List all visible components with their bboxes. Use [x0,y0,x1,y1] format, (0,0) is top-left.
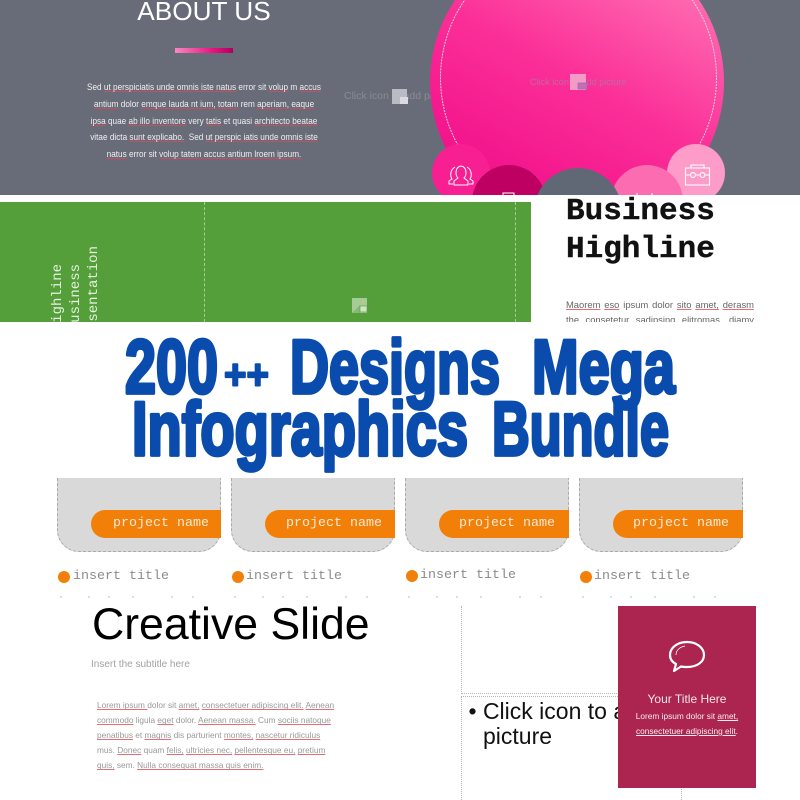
icon: briefcase [686,165,710,185]
body text: amet, [695,299,719,310]
placeholder bullet text: • Click icon to add [468,698,652,724]
placeholder icon: left picture [392,89,408,104]
icon: people [449,166,473,185]
project name 2: project name [286,516,382,531]
card body text [636,711,738,736]
panel: business highline text [531,195,800,322]
circle: dark magenta [472,165,546,239]
title line 1: ++ [224,351,269,398]
icon: stub on dark magenta circle [503,193,514,199]
card body text: Lorem ipsum dolor sit amet, [636,711,738,721]
placeholder text: click icon left: Click icon to add pi [344,90,432,102]
circle: slate [534,168,622,256]
project name 1: project name [113,516,209,531]
title line 1: Designs [290,325,500,410]
about us paragraph: ipsa quae ab illo inventore very tatis et quasi architecto beatae [91,115,317,126]
body text: quis, sem. Nulla consequat massa quis enim. [97,760,264,770]
heading: business highline: Business [566,195,715,229]
main title [125,325,677,473]
about us paragraph: antium dolor emque lauda nt ium, totam rem aperiam, eaque [94,98,314,109]
dashed guide right [515,202,516,322]
title line 2: Bundle [492,387,669,472]
body text: eso [604,299,619,310]
body text: derasm [723,299,754,310]
body text [97,700,334,770]
row of small guide dots [60,596,716,598]
dot 1 [58,571,70,583]
card body text: consectetuer adipiscing elit. [636,726,738,736]
body text: ipsum [623,299,648,310]
placeholder icon: green picture [352,298,367,313]
accent bar [175,48,233,53]
big pink circle [430,0,724,229]
body text: mus. Donec quam felis, ultricies nec, pellentesque eu, pretium [97,745,325,755]
placeholder icon: centre picture [570,74,587,90]
insert title 1: insert title [73,569,169,584]
heading: business highline: Highline [566,232,715,267]
body text: Maorem [566,299,600,310]
pill 2 [265,510,395,538]
card 4 [579,470,743,552]
pill 4 [613,510,743,538]
card 1 [57,470,221,552]
icon: speech bubble [668,640,706,672]
dashed guide left [204,202,205,322]
picture placeholder: upper [461,606,631,694]
body text: dolor [652,299,673,310]
dot 4 [580,571,592,583]
dashed picture circle [440,0,716,216]
about us paragraph: natus error sit volup tatem accus antium lroem ipsum. [107,148,301,159]
circle: light pink briefcase [667,144,725,202]
insert title 4: insert title [594,569,690,584]
project name 4: project name [633,516,729,531]
dot 3 [406,570,418,582]
panel: creative slide text [91,603,370,770]
placeholder text: click icon centre: Click icon to add picture [530,77,627,87]
about us paragraph: vitae dicta sunt explicabo. Sed ut perspic iatis unde omnis iste [90,131,318,142]
card 2 [231,470,395,552]
vertical slide title [50,246,102,322]
insert title 3: insert title [420,568,516,583]
insert title 2: insert title [246,569,342,584]
icon: stub on medium pink circle [637,193,652,198]
subtitle: Insert the subtitle here [91,659,190,670]
project name 3: project name [459,516,555,531]
panel: your title here [618,606,756,788]
picture placeholder: lower [461,696,682,800]
body text [566,299,754,322]
heading: business highline [566,195,715,267]
pill 3 [439,510,569,538]
card 3 [405,470,569,552]
title line 1: Mega [532,325,676,410]
body text: commodo ligula eget dolor. Aenean massa. Cum sociis natoque [97,715,331,725]
placeholder bullet text: picture [483,723,552,749]
body text: sito [677,299,691,310]
placeholder bullet text [468,698,652,749]
about us paragraph: Sed ut perspiciatis unde omnis iste natus error sit volup m accus [87,81,321,92]
circle graphic [392,0,725,195]
pill 1 [91,510,221,538]
title line 1 [125,325,676,410]
body text: Lorem ipsum dolor sit amet, consectetuer adipiscing elit. Aenean [97,700,334,710]
panel: green picture slide [0,202,531,322]
card title: Your Title Here [648,692,726,706]
panel: project cards [57,478,743,598]
about us paragraph [87,81,321,159]
circle: pink people [432,144,490,202]
panel: about us [0,0,800,195]
title line 1: 200 [125,325,218,410]
dot 2 [232,571,244,583]
title line 2: Infographics [132,387,468,472]
body text: penatibus et magnis dis parturient montes, nascetur ridiculus [97,730,320,740]
circle: medium pink [611,165,683,237]
